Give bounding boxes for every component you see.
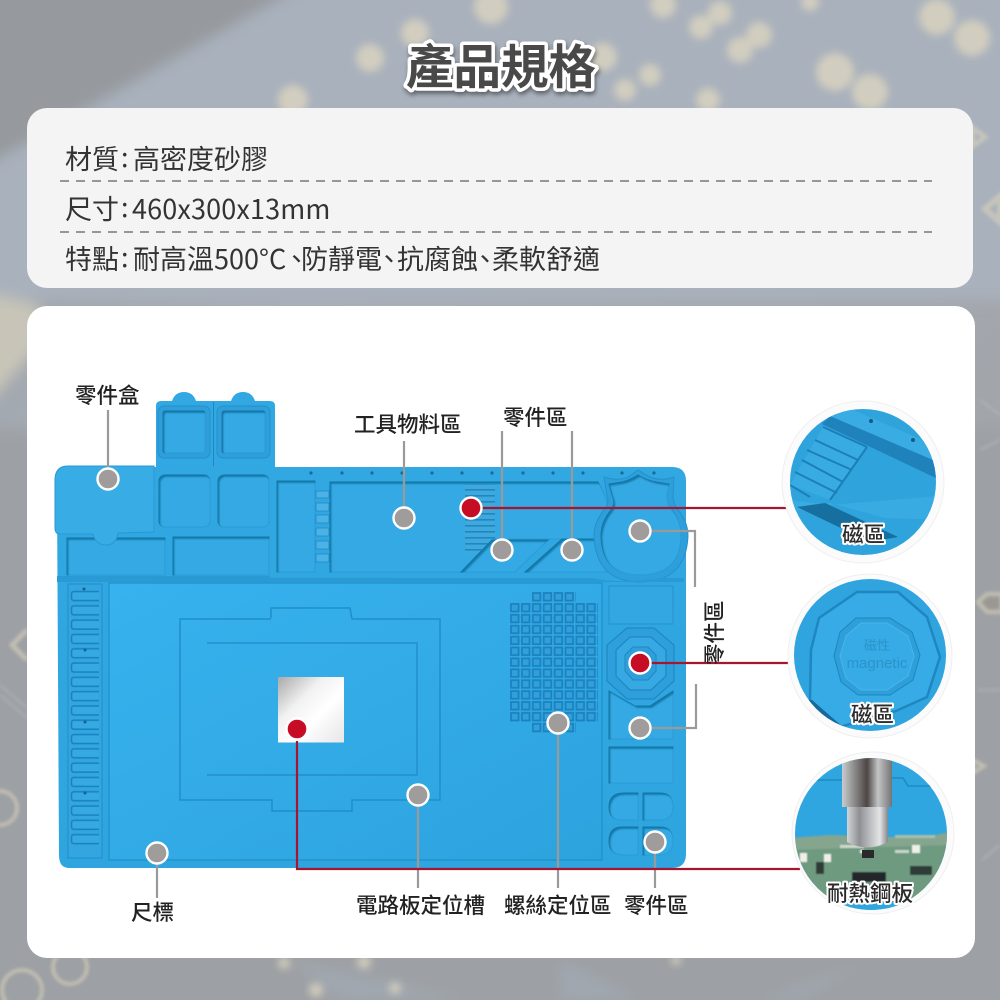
- spec: size: 460x300x13mm: [132, 188, 331, 227]
- panel: product diagram: [27, 306, 975, 958]
- spec: features: 、: [472, 238, 498, 277]
- mat rim dots: [311, 471, 654, 475]
- label: circuit board positioning slot: 電路板定位槽: [356, 889, 485, 920]
- title: 產品規格: [406, 29, 596, 98]
- label: ruler: 尺標: [131, 896, 174, 927]
- label: screw positioning area: 螺絲定位區: [504, 889, 612, 920]
- silicone mat: [55, 392, 688, 868]
- label: parts area vertical: 零件區: [698, 600, 729, 665]
- callout label: 磁區: [851, 698, 894, 729]
- spec: features: 、: [376, 238, 402, 277]
- label: parts area bottom: 零件區: [624, 889, 689, 920]
- spec: material: :: [121, 136, 129, 175]
- leader lines: red: [297, 508, 800, 869]
- spec: features: 特點: [65, 238, 119, 277]
- label: tool material area: 工具物料區: [354, 408, 462, 439]
- spec: features: 防靜電: [301, 238, 382, 277]
- spec: size: :: [121, 186, 129, 225]
- mat body: [55, 392, 686, 868]
- spec: features: 抗腐蝕: [397, 238, 478, 277]
- label: parts box: 零件盒: [75, 379, 140, 410]
- spec: features: 耐高溫500°C: [133, 238, 286, 277]
- circuit board outline groove: [180, 608, 440, 811]
- inner board groove: [207, 643, 417, 775]
- leader lines: grey: [108, 410, 696, 898]
- parts box lid: [55, 466, 154, 545]
- magnetic bowl: [594, 470, 688, 582]
- spec: features: 柔軟舒適: [492, 238, 600, 277]
- callout: magnetic area 2: magnetic: [847, 655, 908, 672]
- spec: size: 尺寸: [65, 188, 119, 227]
- callout: heat resistant steel plate: [790, 752, 955, 917]
- callout: magnetic area 2: [788, 574, 952, 740]
- square recesses: [67, 475, 269, 575]
- spec: material: 材質: [65, 138, 119, 177]
- mat cross ridge: [57, 576, 684, 582]
- tool tray recesses: [277, 481, 608, 572]
- magnetic octagon: [607, 628, 674, 699]
- right column recesses: [609, 586, 673, 783]
- main working area: [109, 583, 602, 860]
- callout: magnetic area 1: [780, 398, 950, 570]
- callout: magnetic area 2: 磁性: [864, 635, 890, 654]
- screw positioning grid: [510, 592, 598, 733]
- marker dots: [98, 468, 666, 864]
- heat resistant steel plate: [278, 677, 344, 742]
- panel: specifications: [27, 108, 973, 288]
- striped ruler: [465, 483, 495, 553]
- triangular recesses: [461, 539, 609, 572]
- callout label: 磁區: [842, 518, 885, 549]
- spec: features: 、: [283, 238, 310, 277]
- label: parts area top: 零件區: [503, 401, 568, 432]
- comb divider: [316, 491, 329, 562]
- tab compartments: [158, 402, 270, 466]
- spec: features: :: [121, 236, 129, 275]
- spec: material: 高密度砂膠: [133, 138, 268, 177]
- callout label: 耐熱鋼板: [827, 877, 913, 908]
- ruler slots: [68, 584, 102, 858]
- clover recesses: [609, 793, 673, 855]
